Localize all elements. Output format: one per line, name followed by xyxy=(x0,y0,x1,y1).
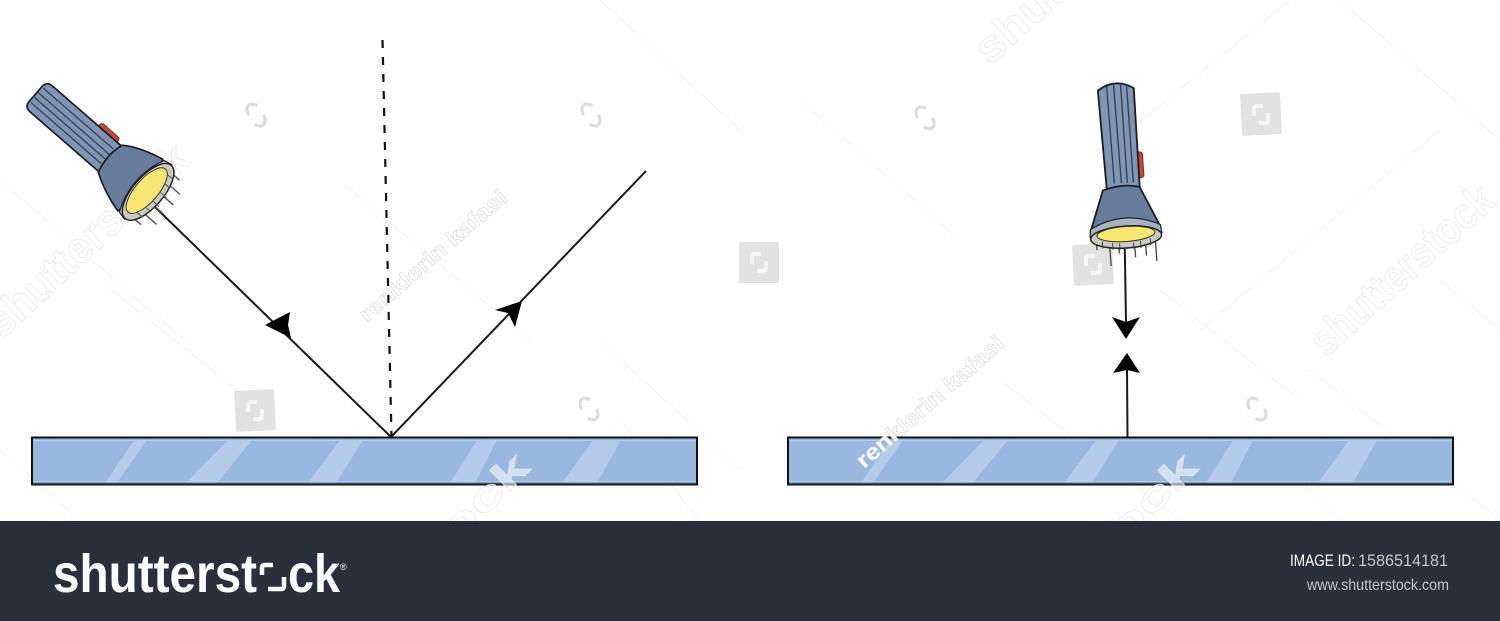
watermark: renklerin kafasi centre: renklerin kafasi xyxy=(354,185,512,327)
watermark small logos xyxy=(247,104,1266,420)
footer band xyxy=(0,521,1500,621)
watermark: stock over right mirror: tock xyxy=(1083,443,1207,567)
downward ray with arrow xyxy=(1112,232,1140,339)
watermark: stock over left mirror: tock xyxy=(415,443,539,567)
reflected ray with arrow xyxy=(391,171,646,437)
right mirror xyxy=(788,438,1453,484)
image id: IMAGE ID: xyxy=(1290,551,1355,570)
left mirror xyxy=(32,438,697,484)
incident ray with arrow xyxy=(155,207,391,437)
registered mark: ® xyxy=(340,562,347,572)
footer logo: shutterst xyxy=(53,544,257,604)
watermark squares xyxy=(234,92,1282,432)
footer logo broken o xyxy=(262,565,284,589)
icon: left flashlight xyxy=(12,67,193,237)
normal dashed line xyxy=(382,40,392,437)
image id number: 1586514181 xyxy=(1358,551,1448,570)
icon: right flashlight xyxy=(1079,81,1164,267)
website: www.shutterstock.com xyxy=(1306,577,1449,594)
upward ray with arrow xyxy=(1113,353,1140,437)
watermark: renklerin kafasi right: renklerin kafasi xyxy=(851,331,1009,473)
footer logo end: ck xyxy=(288,544,341,604)
